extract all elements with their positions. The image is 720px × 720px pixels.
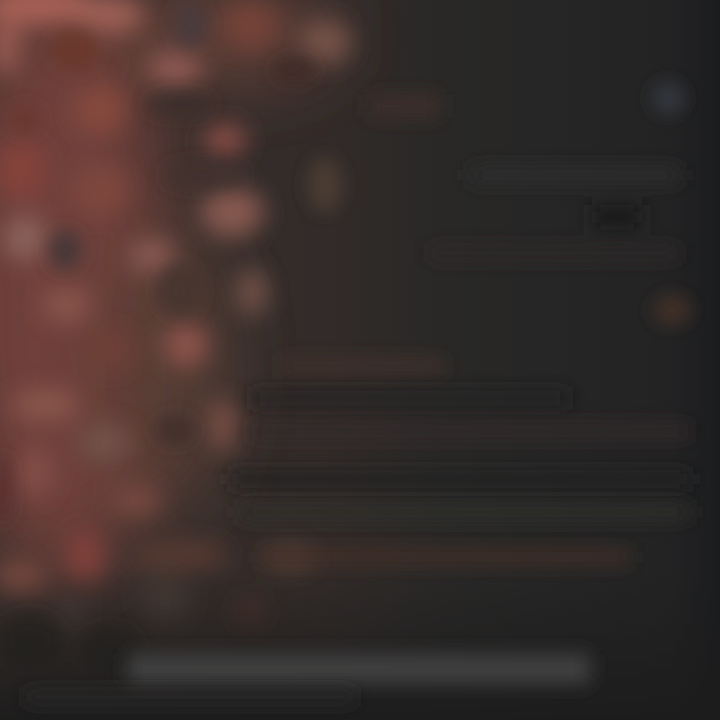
icon: top right spot — [651, 81, 685, 115]
dark row two — [230, 472, 690, 486]
reddish row — [280, 360, 445, 372]
icon: orange spot — [652, 294, 692, 326]
icon: brown spot — [307, 157, 343, 213]
panel: red mottled cluster — [0, 0, 351, 674]
reddish row two — [250, 425, 690, 437]
grey row — [240, 505, 690, 519]
panel: blurred text rows — [230, 81, 692, 564]
bottom fade — [0, 570, 720, 720]
footer smudge — [25, 692, 355, 702]
orange row — [260, 550, 630, 564]
dark gaps — [0, 3, 317, 674]
dark row — [250, 392, 570, 404]
heading smudges — [370, 95, 680, 258]
footer bar — [128, 654, 590, 684]
light blotches — [0, 0, 351, 633]
